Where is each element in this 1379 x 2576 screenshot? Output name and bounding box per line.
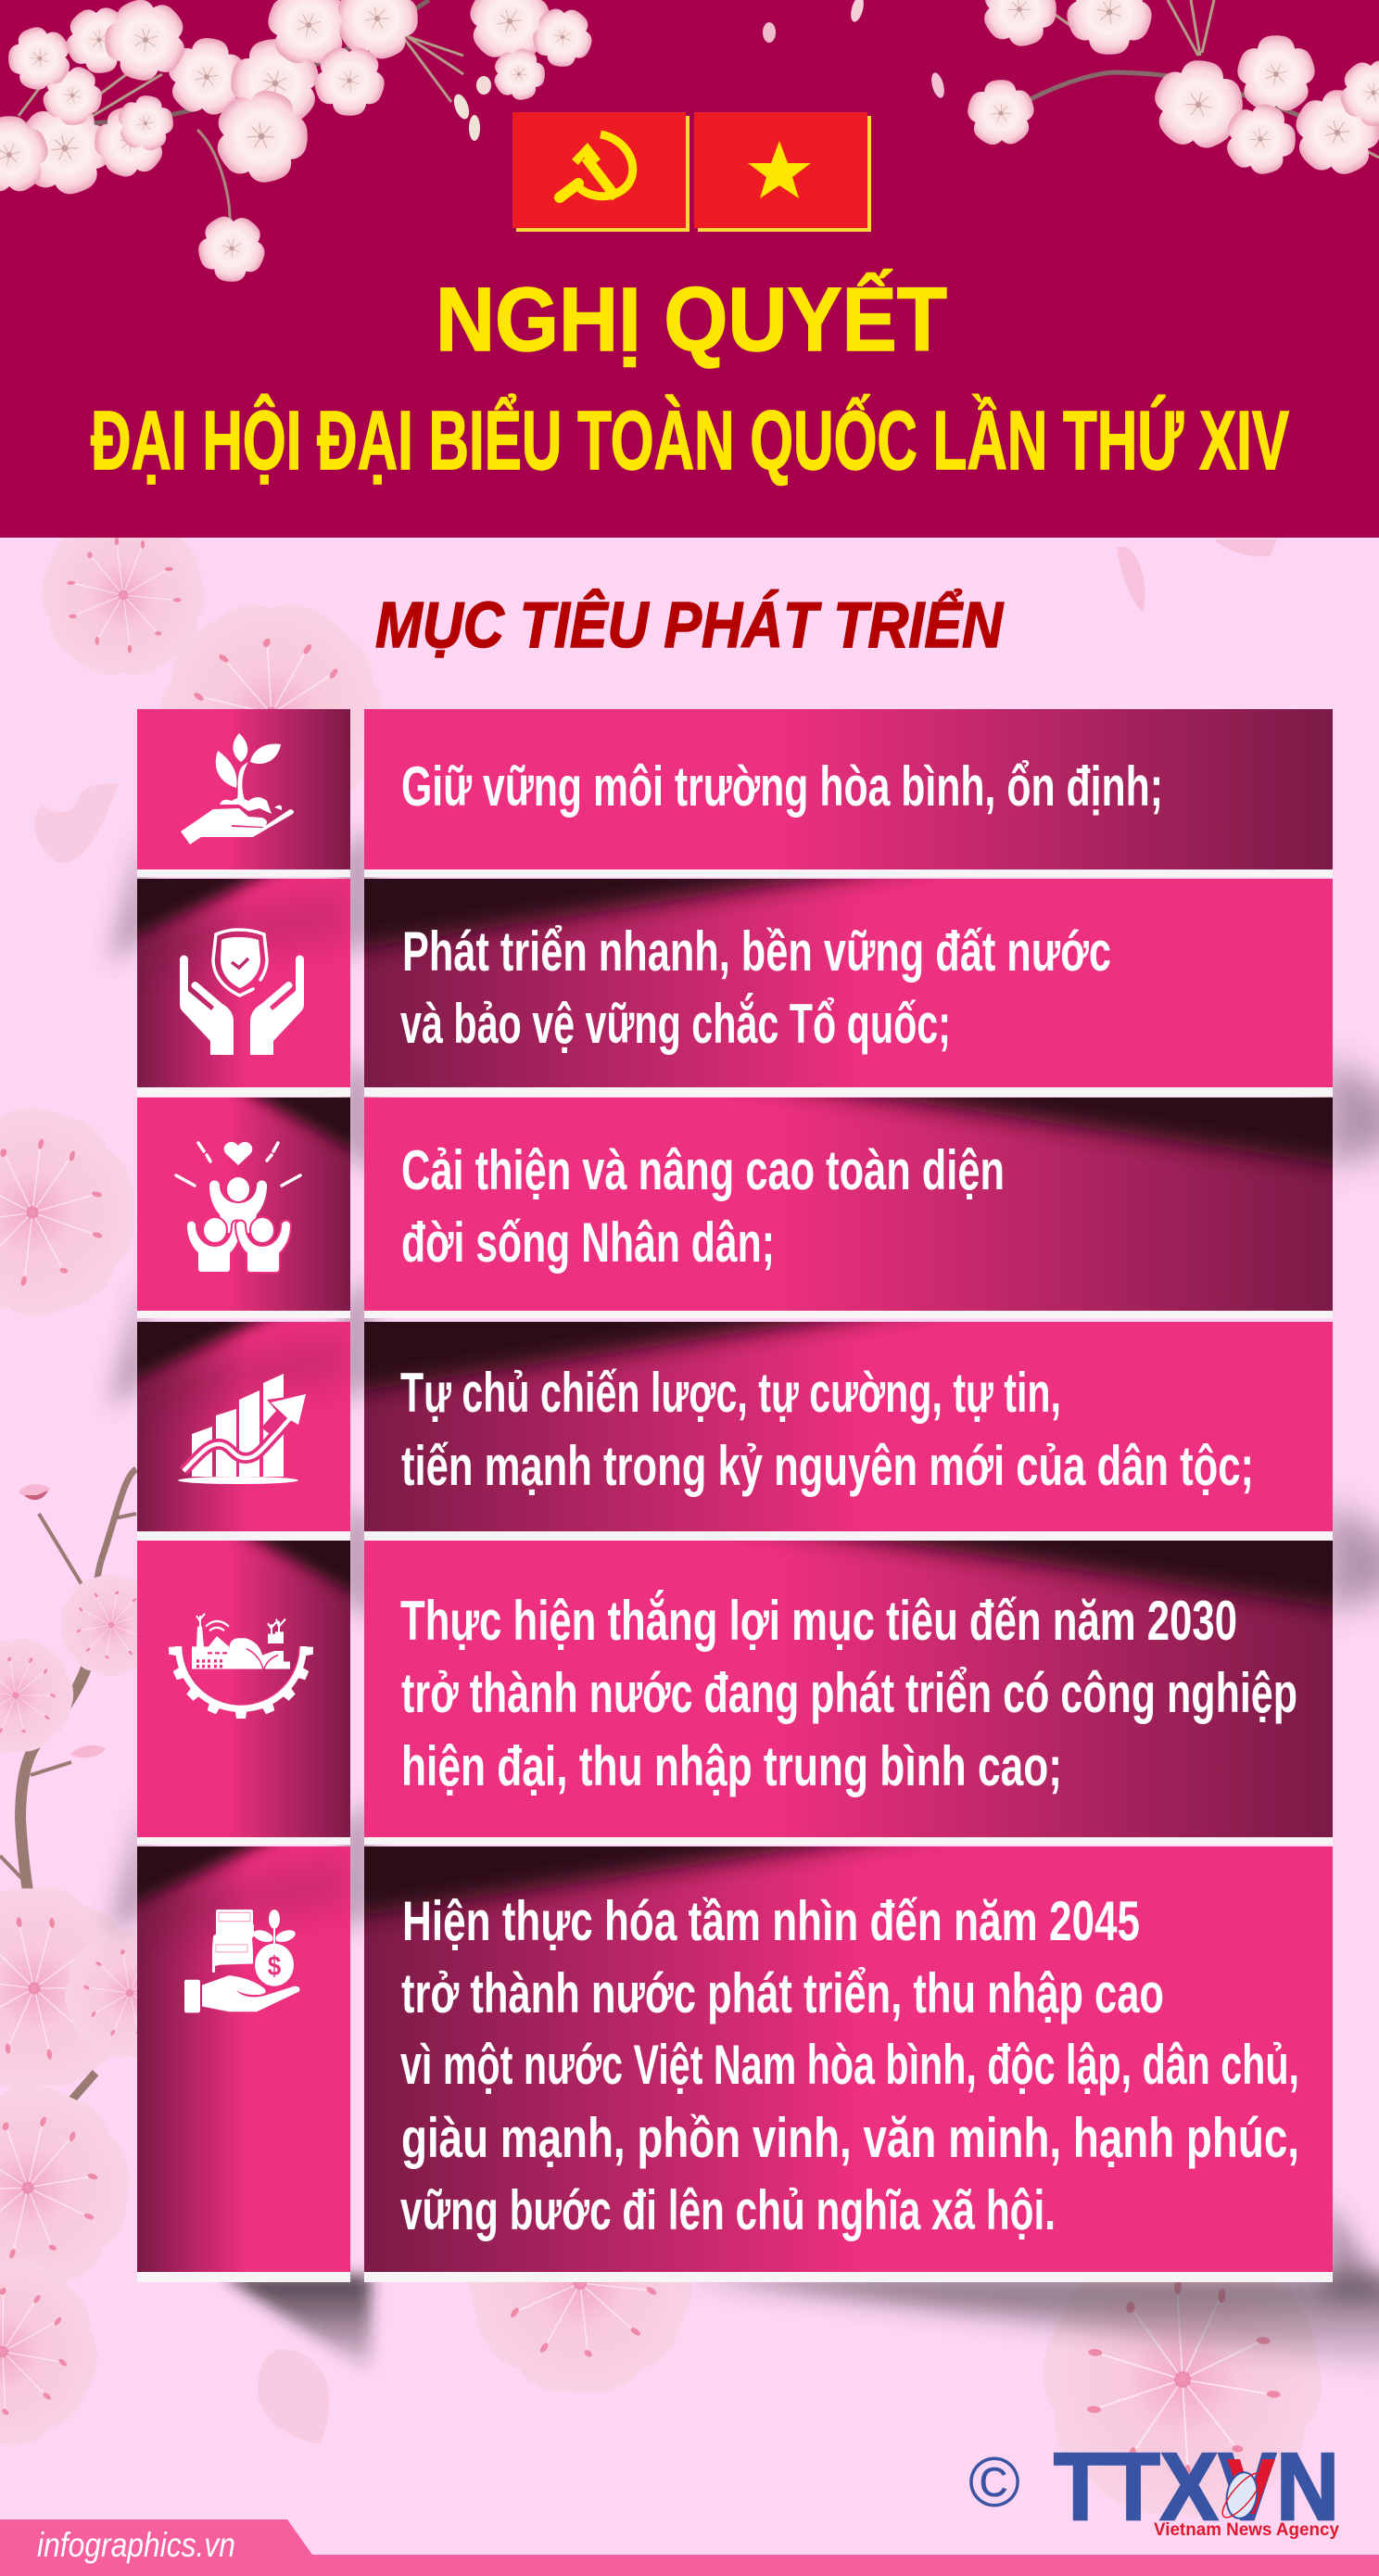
flag: Communist Party, hammer and sickle — [512, 112, 690, 232]
text: rapid sustainable development: và bảo vệ vững chắc Tổ quốc; — [400, 993, 951, 1055]
footer bar with website tab: infographics.vn — [37, 2526, 235, 2564]
panel: row 4 — [137, 1322, 1333, 1541]
text: 2045 vision: vững bước đi lên chủ nghĩa xã hội. — [400, 2179, 1056, 2241]
icon: hand holding coins and money plant — [184, 1910, 299, 2012]
background blossoms and branch — [0, 514, 1348, 2550]
heading: development goals: MỤC TIÊU PHÁT TRIỂN — [375, 588, 1004, 661]
logo: TTXVN: Vietnam News Agency — [1154, 2520, 1339, 2540]
title: NGHỊ QUYẾT — [436, 269, 947, 370]
text: 2030 target — [400, 1590, 1297, 1797]
header band — [0, 0, 1379, 538]
icon: hand holding coins and money plant: $ — [268, 1951, 282, 1982]
panel: row 6 — [111, 1816, 1333, 2282]
text: improve people's lives — [401, 1139, 1005, 1274]
icon: growth chart with arrow — [178, 1374, 306, 1484]
text: strategic autonomy: Tự chủ chiến lược, tự cường, tự tin, — [400, 1362, 1061, 1424]
icon: hands protecting shield — [180, 930, 304, 1055]
icon: people with heart — [176, 1142, 300, 1273]
panel: row 5 — [137, 1541, 1333, 1845]
flag: Vietnam, gold star — [694, 112, 871, 232]
text: rapid sustainable development: Phát triển nhanh, bền vững đất nước — [402, 920, 1111, 983]
text: 2045 vision — [400, 1890, 1299, 2241]
icon: sprout in hand — [181, 733, 294, 844]
text: rapid sustainable development — [400, 920, 1111, 1055]
text: improve people's lives: đời sống Nhân dân; — [401, 1212, 775, 1274]
panel: row 1 — [137, 709, 1333, 877]
copyright symbol: © — [968, 2443, 1020, 2522]
text: 2045 vision: Hiện thực hóa tầm nhìn đến năm 2045 — [402, 1890, 1140, 1952]
icon: green industry gear — [169, 1614, 313, 1719]
footer bar with website tab — [0, 2519, 1379, 2576]
text: improve people's lives: Cải thiện và nâng cao toàn diện — [401, 1139, 1005, 1201]
text: strategic autonomy — [400, 1362, 1254, 1497]
panel: row 2 — [137, 879, 1333, 1097]
header blossom branches — [0, 0, 1379, 299]
text: 2030 target: hiện đại, thu nhập trung bình cao; — [401, 1735, 1062, 1797]
title — [91, 269, 1289, 488]
logo: TTXVN: TTXVN — [1054, 2433, 1339, 2540]
cast shadows around the rows — [109, 825, 1379, 2373]
panel: row 3 — [137, 1098, 1333, 1318]
